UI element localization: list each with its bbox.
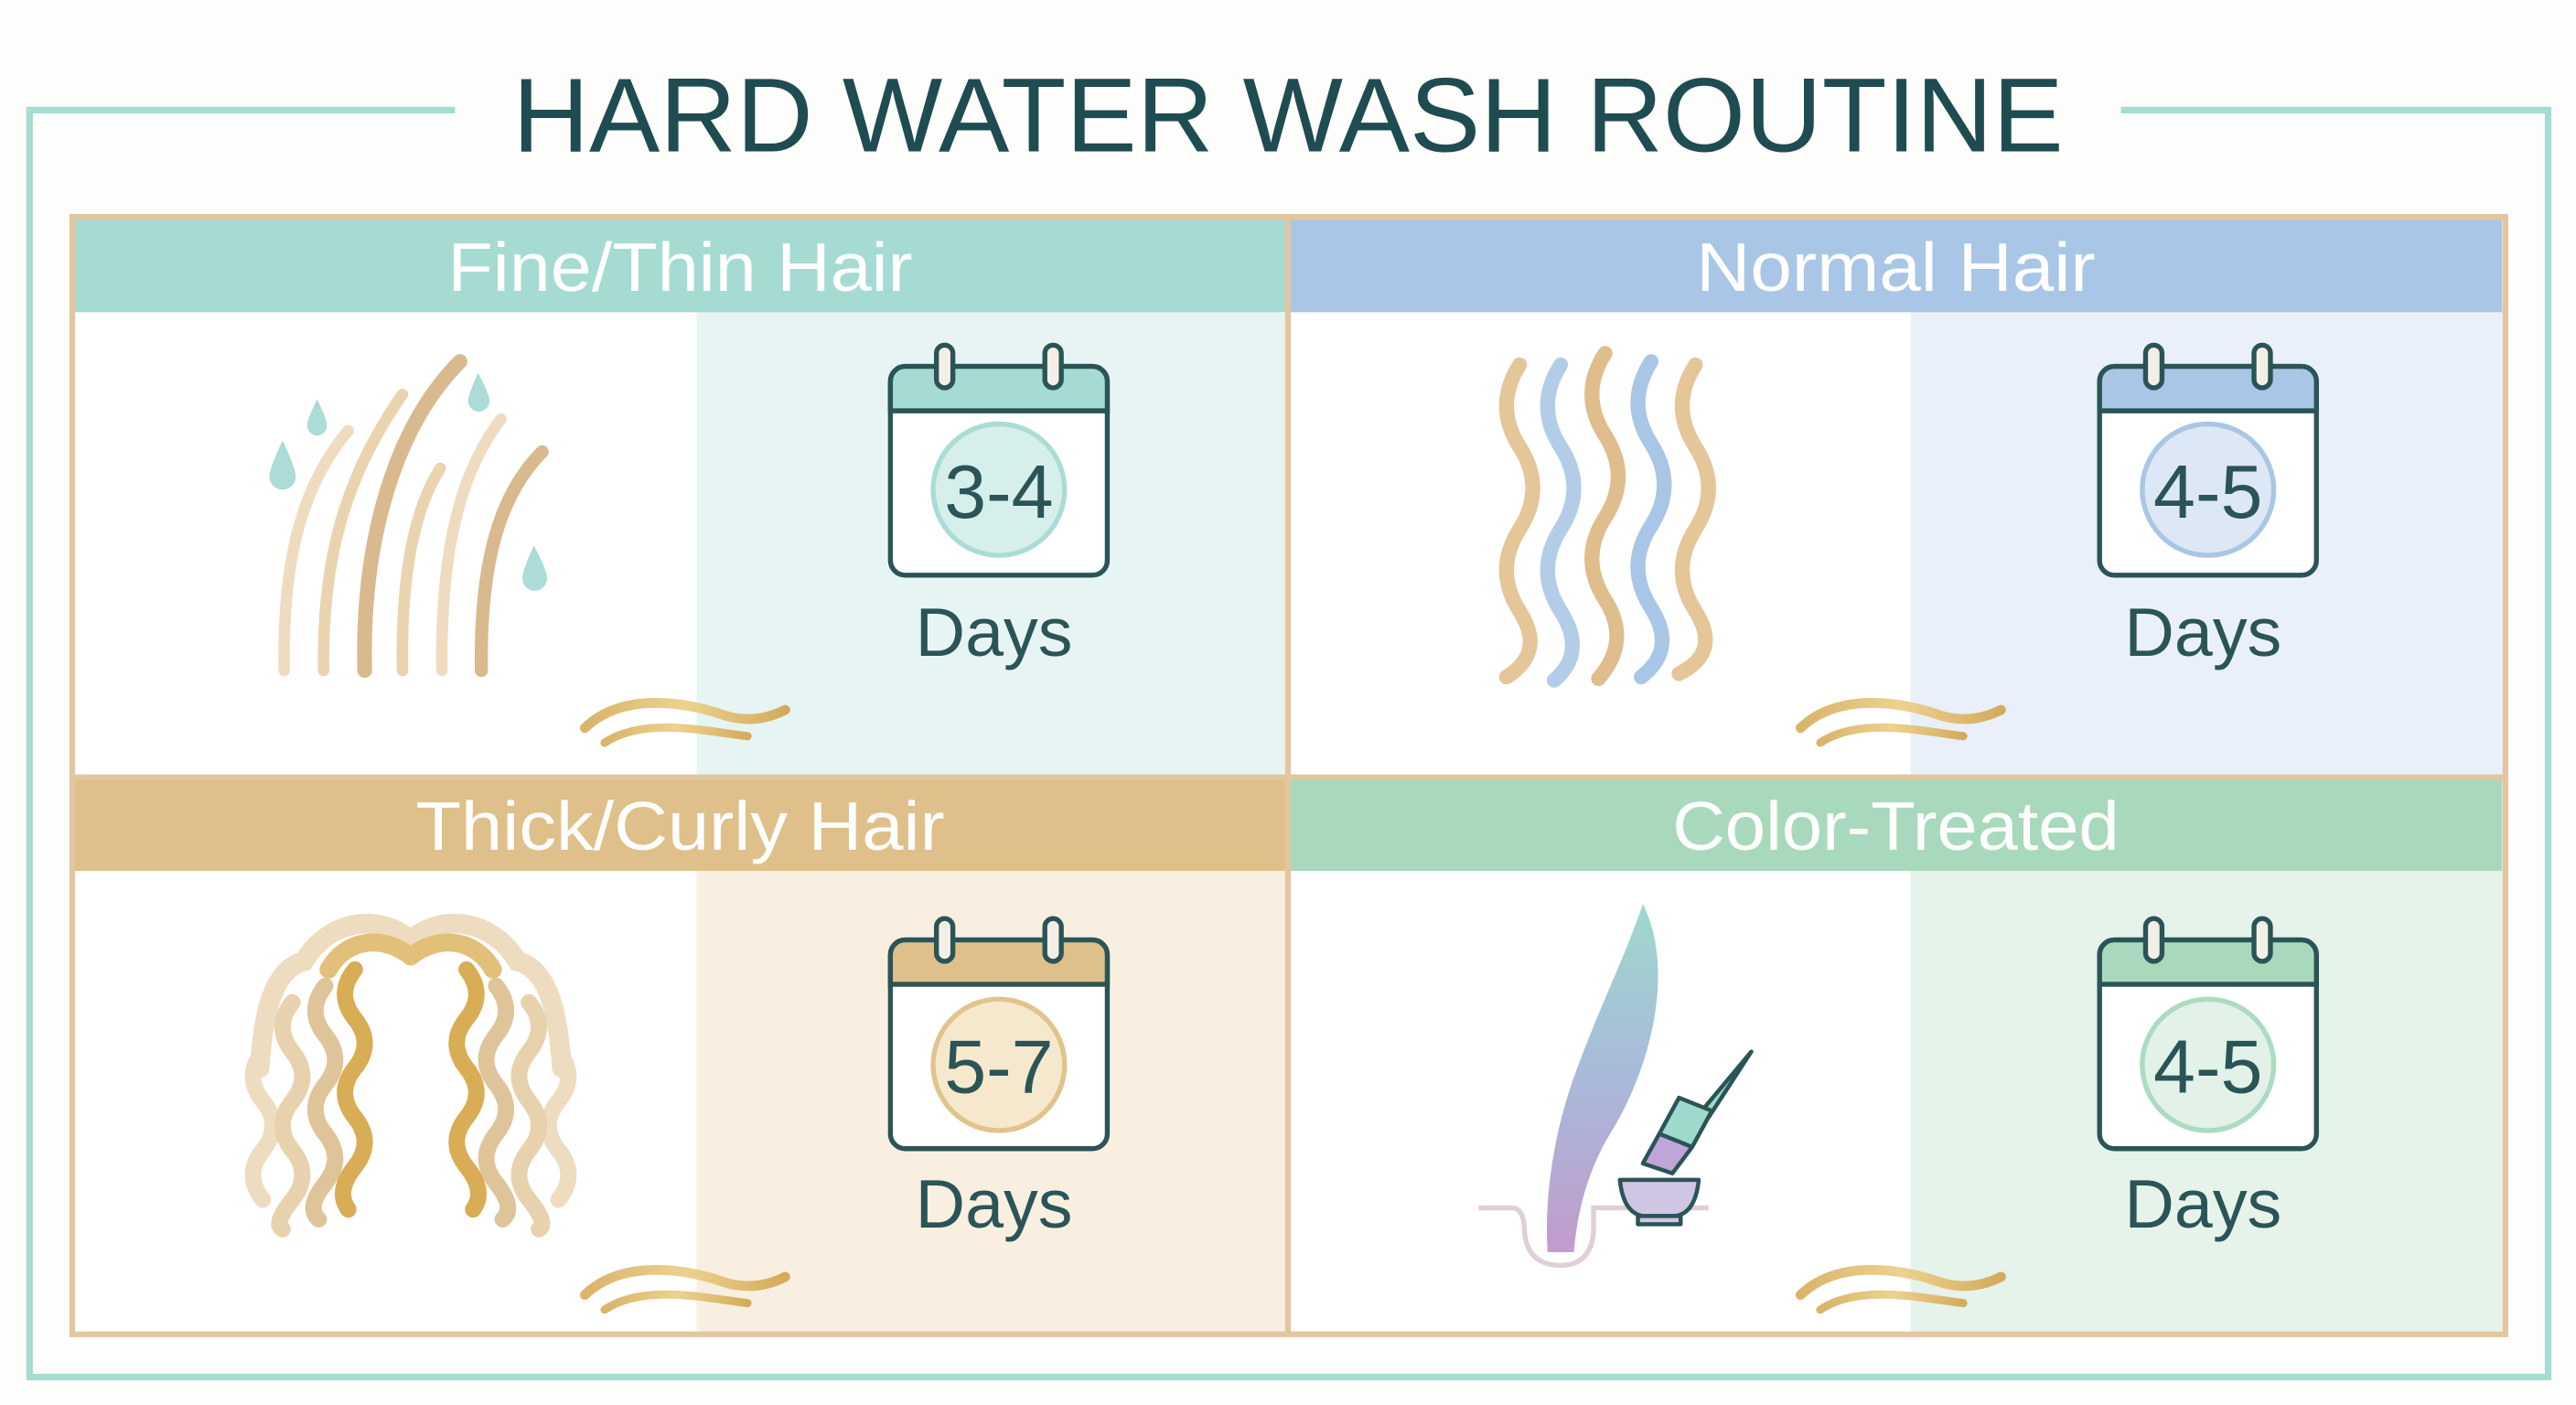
- header: normal: Normal Hair: [1696, 229, 2096, 306]
- calendar 4-5 green: 4-5: [2153, 1024, 2262, 1110]
- title: HARD WATER WASH ROUTINE: [512, 57, 2064, 174]
- calendar 3-4: [890, 345, 1107, 575]
- panel: thick/curly hair: [74, 779, 1288, 1333]
- label: days: Days: [2124, 1165, 2281, 1242]
- calendar 4-5: [2099, 345, 2316, 575]
- icon: curly hair: [253, 924, 568, 1229]
- panel: color-treated: [1288, 779, 2502, 1333]
- icon: thin hair strands with drops: [270, 361, 547, 670]
- panel: fine/thin hair: [74, 219, 1288, 776]
- header: thick/curly: [74, 779, 1288, 871]
- header: thick/curly: Thick/Curly Hair: [415, 788, 945, 864]
- calendar 5-7: [890, 918, 1107, 1149]
- grid border: [72, 217, 2506, 1335]
- calendar 4-5: 4-5: [2153, 449, 2262, 534]
- swoosh: [585, 1270, 785, 1310]
- panel: normal hair: [1288, 219, 2502, 776]
- swoosh: [585, 702, 785, 743]
- header: normal: [1288, 219, 2502, 312]
- calendar 5-7: 5-7: [944, 1024, 1054, 1110]
- icon: dyed hair strand with brush and bowl: [1478, 904, 1751, 1265]
- swoosh: [1800, 702, 2001, 743]
- header: color-treated: Color-Treated: [1672, 788, 2120, 864]
- icon: wavy hair: [1507, 353, 1709, 681]
- header: fine/thin: Fine/Thin Hair: [447, 229, 913, 306]
- label: days: Days: [916, 594, 1072, 670]
- header: fine/thin: [74, 219, 1288, 312]
- header: color-treated: [1288, 779, 2502, 871]
- calendar 3-4: 3-4: [944, 449, 1054, 534]
- swoosh: [1800, 1270, 2001, 1310]
- label: days: Days: [2124, 594, 2281, 670]
- label: days: Days: [916, 1165, 1072, 1242]
- calendar 4-5 green: [2099, 918, 2316, 1149]
